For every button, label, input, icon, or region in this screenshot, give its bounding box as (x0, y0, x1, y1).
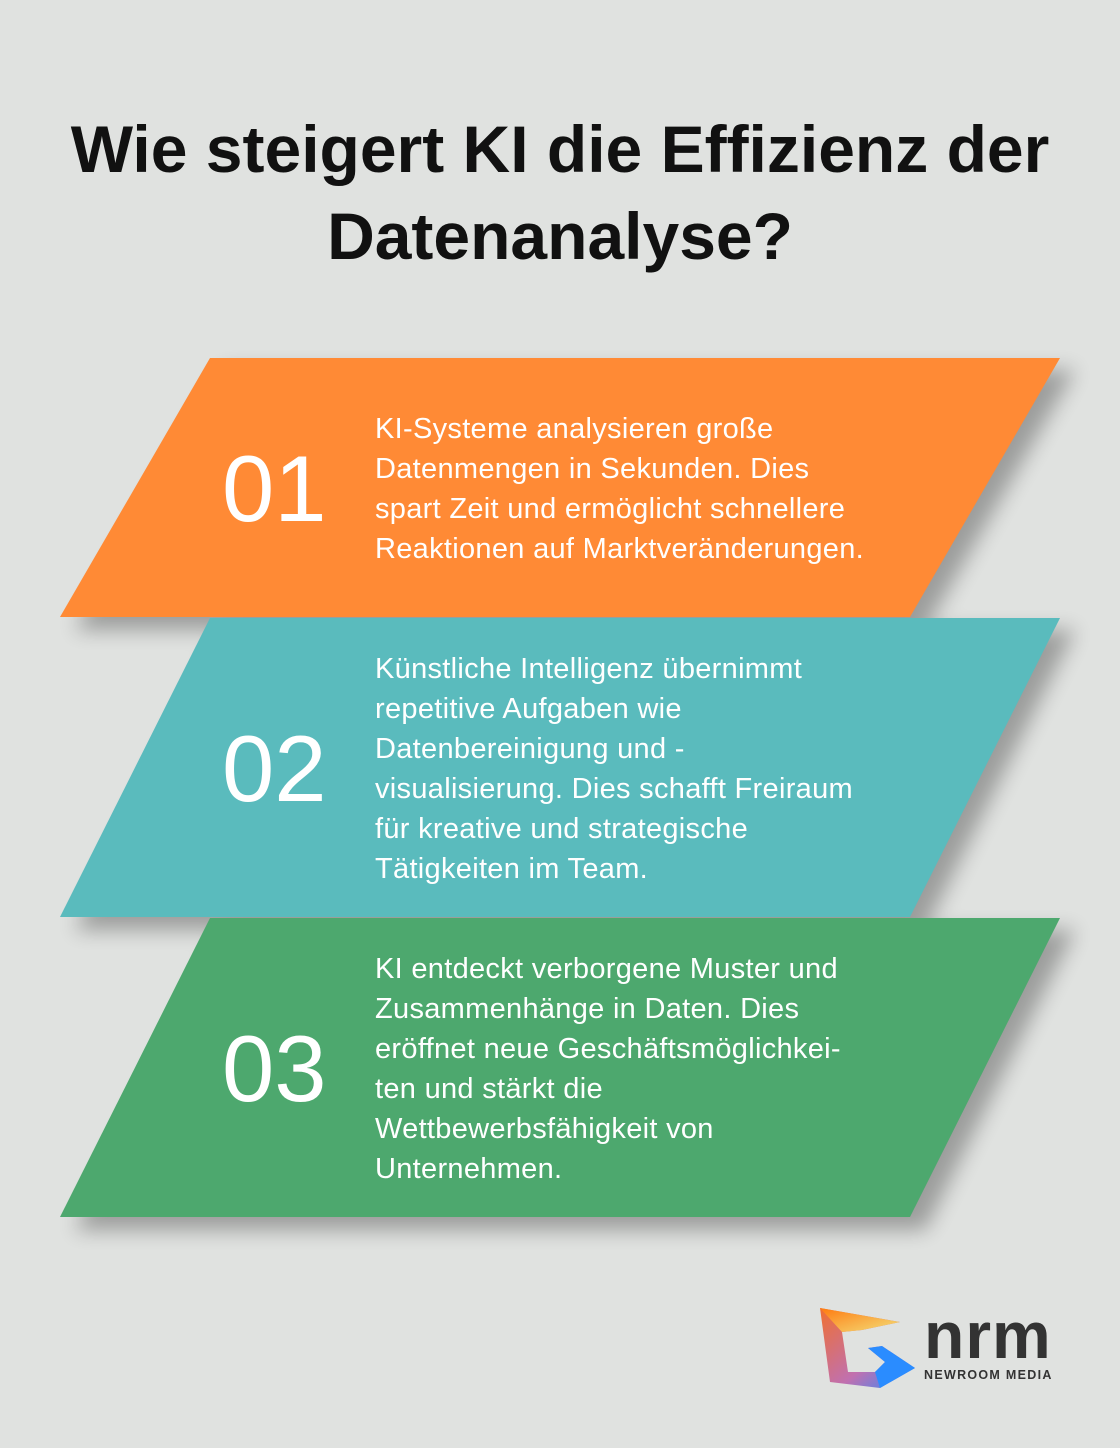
text 3: KI entdeckt verborgene Muster und (375, 953, 838, 985)
text 3: Unternehmen. (375, 1153, 562, 1185)
title: Wie steigert KI die Effizienz der (71, 112, 1049, 186)
text 3: Wettbewerbsfähigkeit von (375, 1113, 714, 1145)
text 1: Reaktionen auf Marktveränderungen. (375, 533, 864, 565)
text 2: visualisierung. Dies schafft Freiraum (375, 773, 853, 805)
number 01: 01 (222, 436, 327, 541)
text 2: für kreative und strategische (375, 813, 748, 845)
panel 2 (60, 618, 1060, 917)
text 3 (375, 953, 841, 1185)
text 3: ten und stärkt die (375, 1073, 603, 1105)
logo text: NEWROOM MEDIA (924, 1368, 1053, 1382)
text 2 (375, 653, 853, 885)
title (70, 112, 1049, 273)
number 03: 03 (222, 1016, 327, 1121)
logo text: nrm (924, 1298, 1052, 1372)
text 1 (375, 413, 864, 565)
title: Datenanalyse? (327, 199, 793, 273)
text 2: Tätigkeiten im Team. (375, 853, 648, 885)
panel 3 (60, 918, 1060, 1217)
logo icon (820, 1308, 915, 1388)
text 3: eröffnet neue Geschäftsmöglichkei- (375, 1033, 841, 1065)
number 02: 02 (222, 716, 327, 821)
text 2: repetitive Aufgaben wie (375, 693, 682, 725)
text 1: KI-Systeme analysieren große (375, 413, 773, 445)
text 2: Datenbereinigung und - (375, 733, 685, 765)
text 2: Künstliche Intelligenz übernimmt (375, 653, 802, 685)
text 1: spart Zeit und ermöglicht schnellere (375, 493, 845, 525)
text 3: Zusammenhänge in Daten. Dies (375, 993, 799, 1025)
text 1: Datenmengen in Sekunden. Dies (375, 453, 809, 485)
panel 1 (60, 358, 1060, 617)
